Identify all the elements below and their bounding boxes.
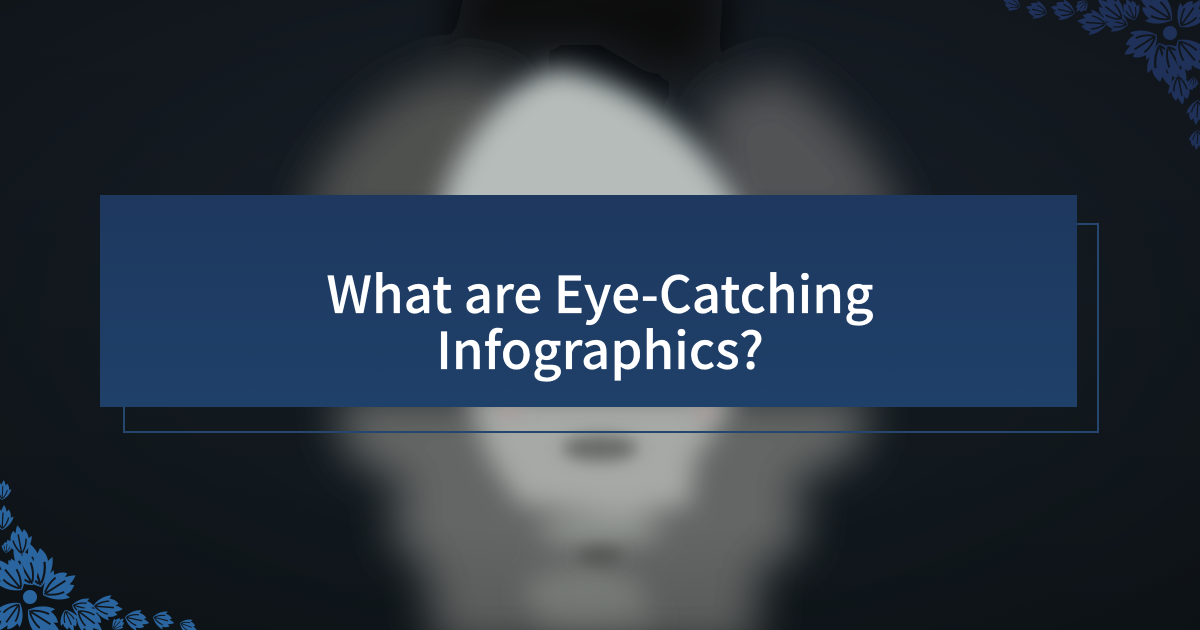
facial shadows (498, 407, 717, 565)
bright centre areas (436, 68, 750, 630)
title (326, 254, 874, 384)
side lobes (300, 0, 905, 630)
panel: title banner (100, 195, 1077, 407)
title: Infographics? (436, 310, 764, 384)
title: What are Eye-Catching (326, 254, 874, 328)
outline frame behind panel (123, 223, 1099, 433)
